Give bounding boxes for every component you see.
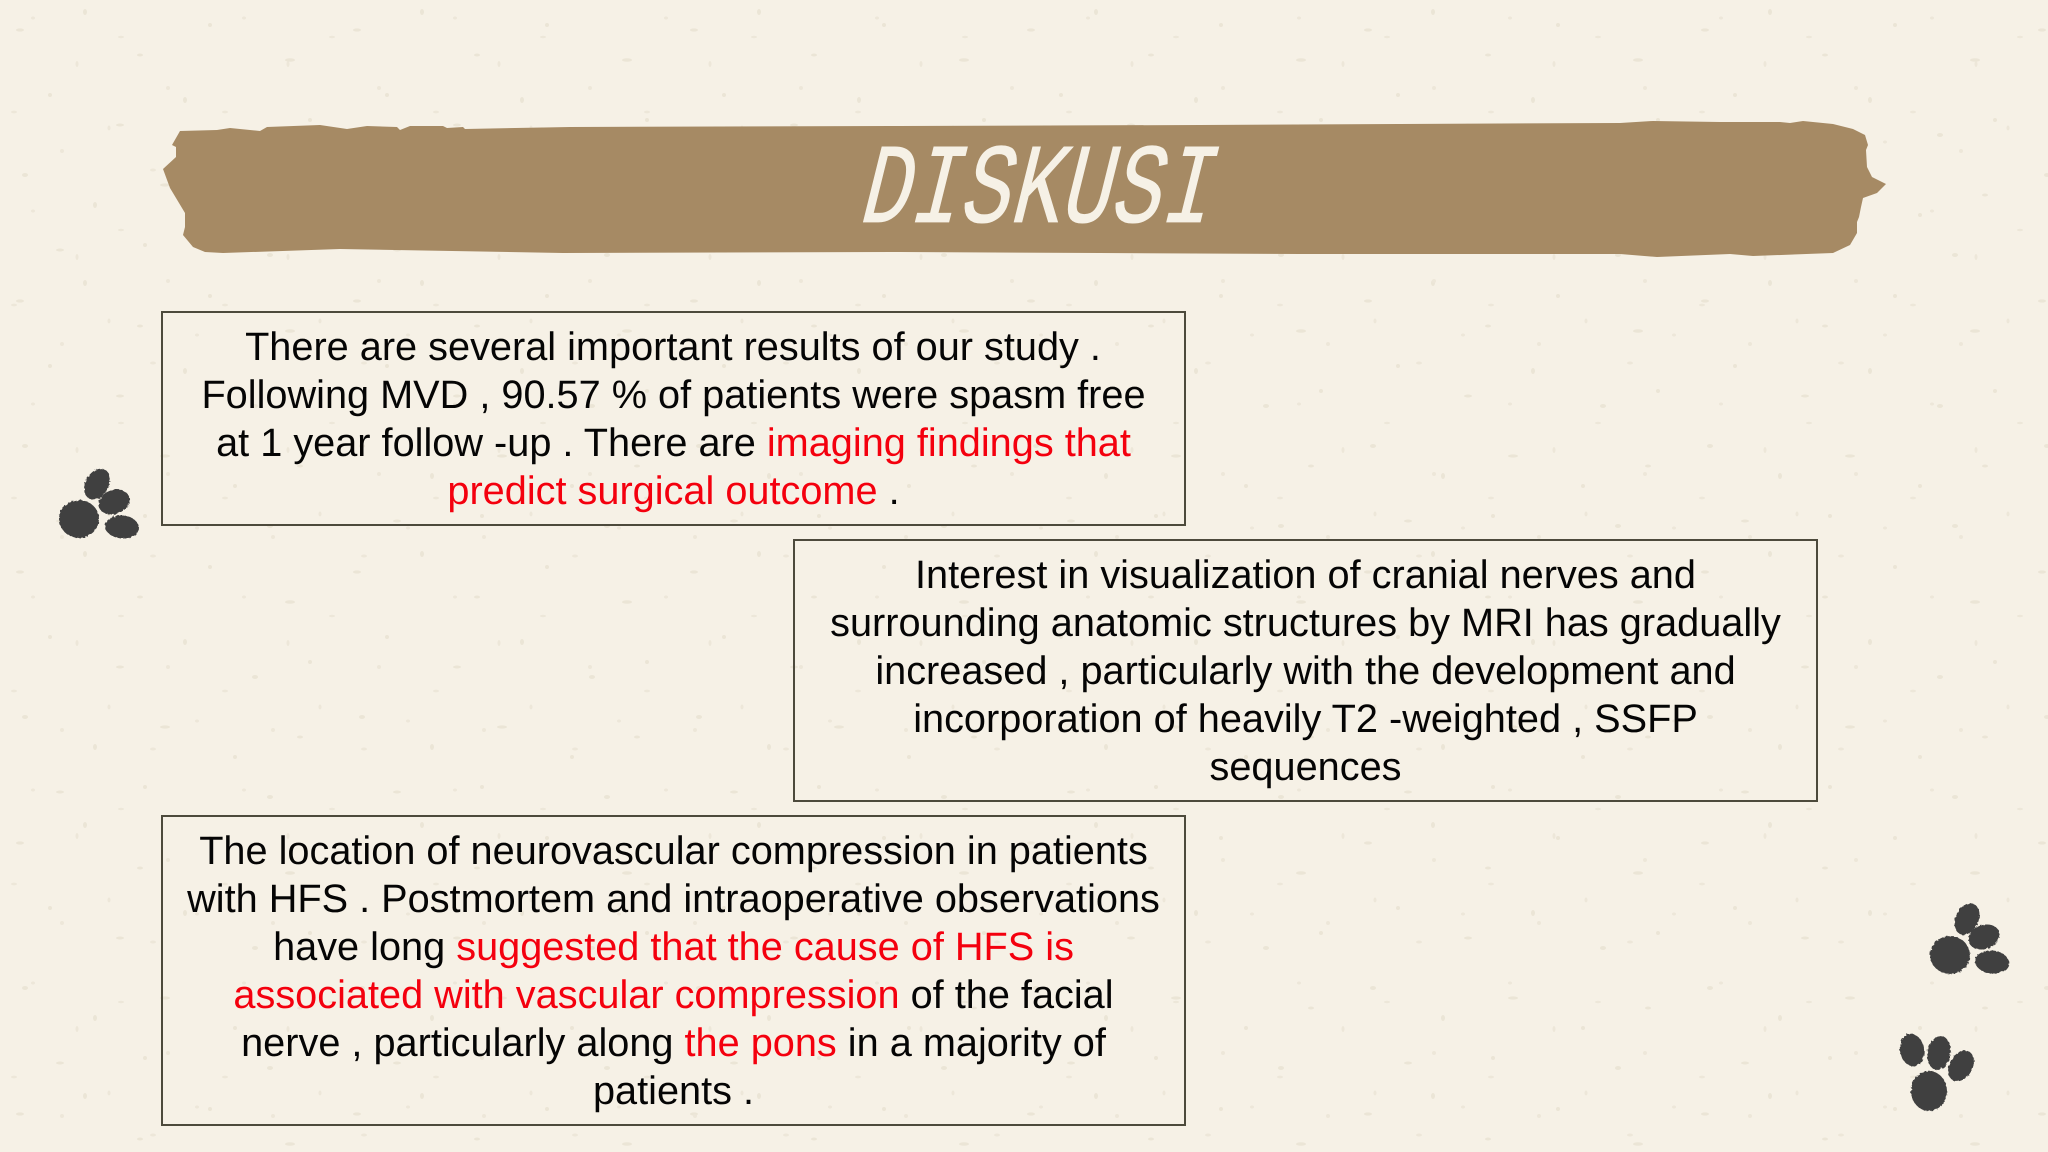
title banner	[163, 121, 1886, 257]
text box: MRI visualization: increased , particularly with the development and	[875, 649, 1736, 693]
text box: neurovascular compression: patients .	[593, 1069, 754, 1113]
text box: neurovascular compression	[161, 815, 1186, 1126]
text box: study results	[161, 311, 1186, 526]
text box: MRI visualization: surrounding anatomic structures by MRI has gradually	[830, 601, 1781, 645]
text box: study results: at 1 year follow -up . There are imaging findings that	[216, 421, 1131, 465]
icon: paw print right upper	[1930, 899, 2010, 975]
text box: neurovascular compression: have long suggested that the cause of HFS is	[273, 925, 1074, 969]
text box: neurovascular compression: nerve , particularly along the pons in a majority of	[241, 1021, 1106, 1065]
text box: MRI visualization: incorporation of heavily T2 -weighted , SSFP	[913, 697, 1698, 741]
text box: neurovascular compression: with HFS . Postmortem and intraoperative observations	[187, 877, 1160, 921]
text box: MRI visualization: sequences	[1210, 745, 1401, 789]
text box: MRI visualization	[793, 539, 1818, 802]
text box: study results: predict surgical outcome .	[447, 469, 900, 513]
icon: paw print left	[59, 464, 140, 540]
title: DISKUSI	[857, 128, 1223, 257]
text box: MRI visualization: Interest in visualization of cranial nerves and	[915, 553, 1696, 597]
text box: neurovascular compression: The location of neurovascular compression in patients	[199, 829, 1148, 873]
text box: study results: There are several important results of our study .	[245, 325, 1101, 369]
text box: study results: Following MVD , 90.57 % of patients were spasm free	[201, 373, 1146, 417]
icon: paw print right lower	[1897, 1032, 1979, 1111]
text box: neurovascular compression: associated with vascular compression of the facial	[233, 973, 1114, 1017]
